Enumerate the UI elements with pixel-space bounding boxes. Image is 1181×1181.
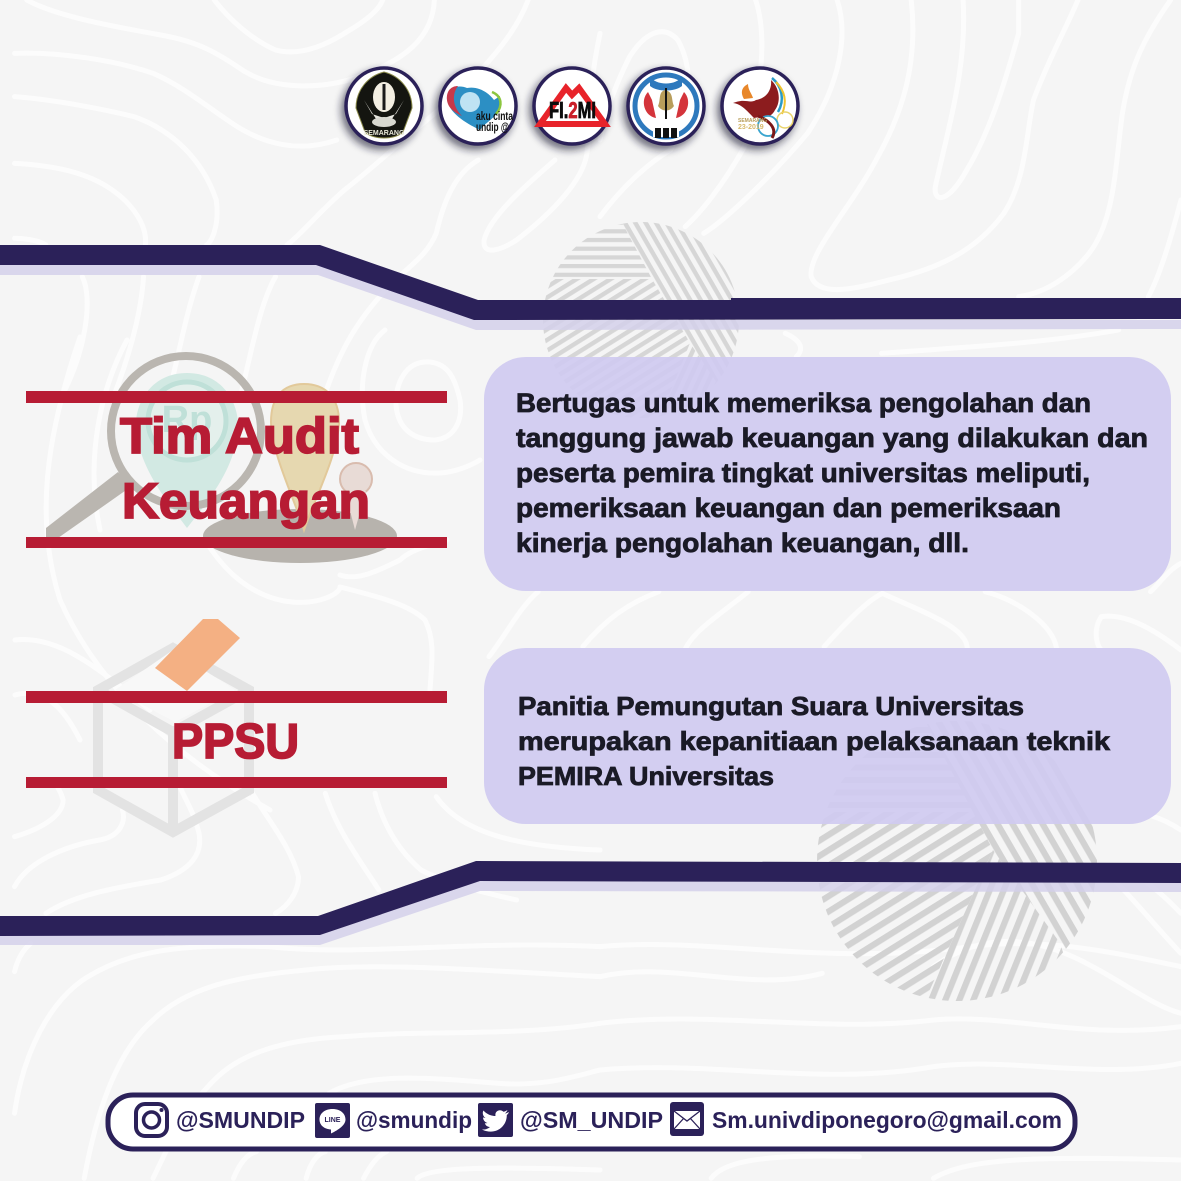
description text: Tim Audit Keuangan	[516, 388, 1148, 558]
logo: aku cinta undip	[435, 68, 516, 150]
icon: line: LINE	[325, 1117, 341, 1124]
icon: map pins on stamp base	[203, 384, 397, 563]
patterned circle: upper	[544, 222, 738, 357]
logo: aku cinta undip: aku cinta	[476, 111, 513, 123]
description text: PPSU: Panitia Pemungutan Suara Universitas	[518, 691, 1024, 721]
icon: twitter	[478, 1103, 513, 1137]
description text: PPSU: PEMIRA Universitas	[518, 761, 774, 791]
heading block: Tim Audit Keuangan	[26, 391, 447, 548]
description text: Tim Audit Keuangan: peserta pemira tingkat universitas meliputi,	[516, 458, 1090, 488]
logo row	[341, 68, 798, 150]
logo: phoenix: 23-2019	[738, 124, 764, 131]
icon: mail	[670, 1102, 704, 1136]
panel: Tim Audit Keuangan description	[484, 357, 1171, 591]
logo: FI.2MI: FI.2MI	[549, 97, 596, 123]
patterned circle: lower	[817, 824, 1097, 1001]
icon: line	[315, 1103, 350, 1138]
logo: Universitas Diponegoro	[341, 68, 422, 150]
logo: Universitas Diponegoro: SEMARANG	[364, 130, 405, 137]
footer contact bar	[108, 1095, 1075, 1149]
logo: SM Undip	[623, 68, 704, 150]
description text: Tim Audit Keuangan: tanggung jawab keuangan yang dilakukan dan	[516, 423, 1148, 453]
icon: instagram	[136, 1104, 167, 1136]
logo: phoenix	[717, 68, 798, 150]
logo: FI.2MI	[529, 68, 610, 150]
description text: Tim Audit Keuangan: Bertugas untuk memeriksa pengolahan dan	[516, 388, 1091, 418]
icon: magnifier with Rp coin	[46, 356, 261, 538]
description text: Tim Audit Keuangan: kinerja pengolahan keuangan, dll.	[516, 528, 969, 558]
logo: aku cinta undip: undip @	[476, 122, 509, 134]
icon: magnifier with Rp coin: Rp	[162, 399, 212, 441]
contact: line handle: @smundip	[356, 1107, 472, 1133]
description text: Tim Audit Keuangan: pemeriksaan keuangan dan pemeriksaan	[516, 493, 1061, 523]
top ribbon	[0, 245, 1181, 330]
contact: email: Sm.univdiponegoro@gmail.com	[712, 1107, 1062, 1133]
heading block: PPSU	[26, 691, 447, 788]
description text: PPSU	[518, 691, 1111, 791]
contact: twitter handle: @SM_UNDIP	[520, 1107, 663, 1133]
description text: PPSU: merupakan kepanitiaan pelaksanaan teknik	[518, 726, 1111, 756]
bottom ribbon	[0, 861, 1181, 945]
heading: Tim Audit Keuangan	[120, 408, 370, 529]
heading: Tim Audit Keuangan: Keuangan	[122, 473, 370, 529]
icon: ballot box	[98, 619, 249, 832]
panel: PPSU description	[484, 648, 1171, 824]
heading: PPSU: PPSU	[172, 715, 299, 769]
logo: phoenix: SEMARANG	[738, 118, 767, 124]
heading: Tim Audit Keuangan: Tim Audit	[120, 408, 359, 464]
contact: instagram handle: @SMUNDIP	[176, 1107, 305, 1133]
